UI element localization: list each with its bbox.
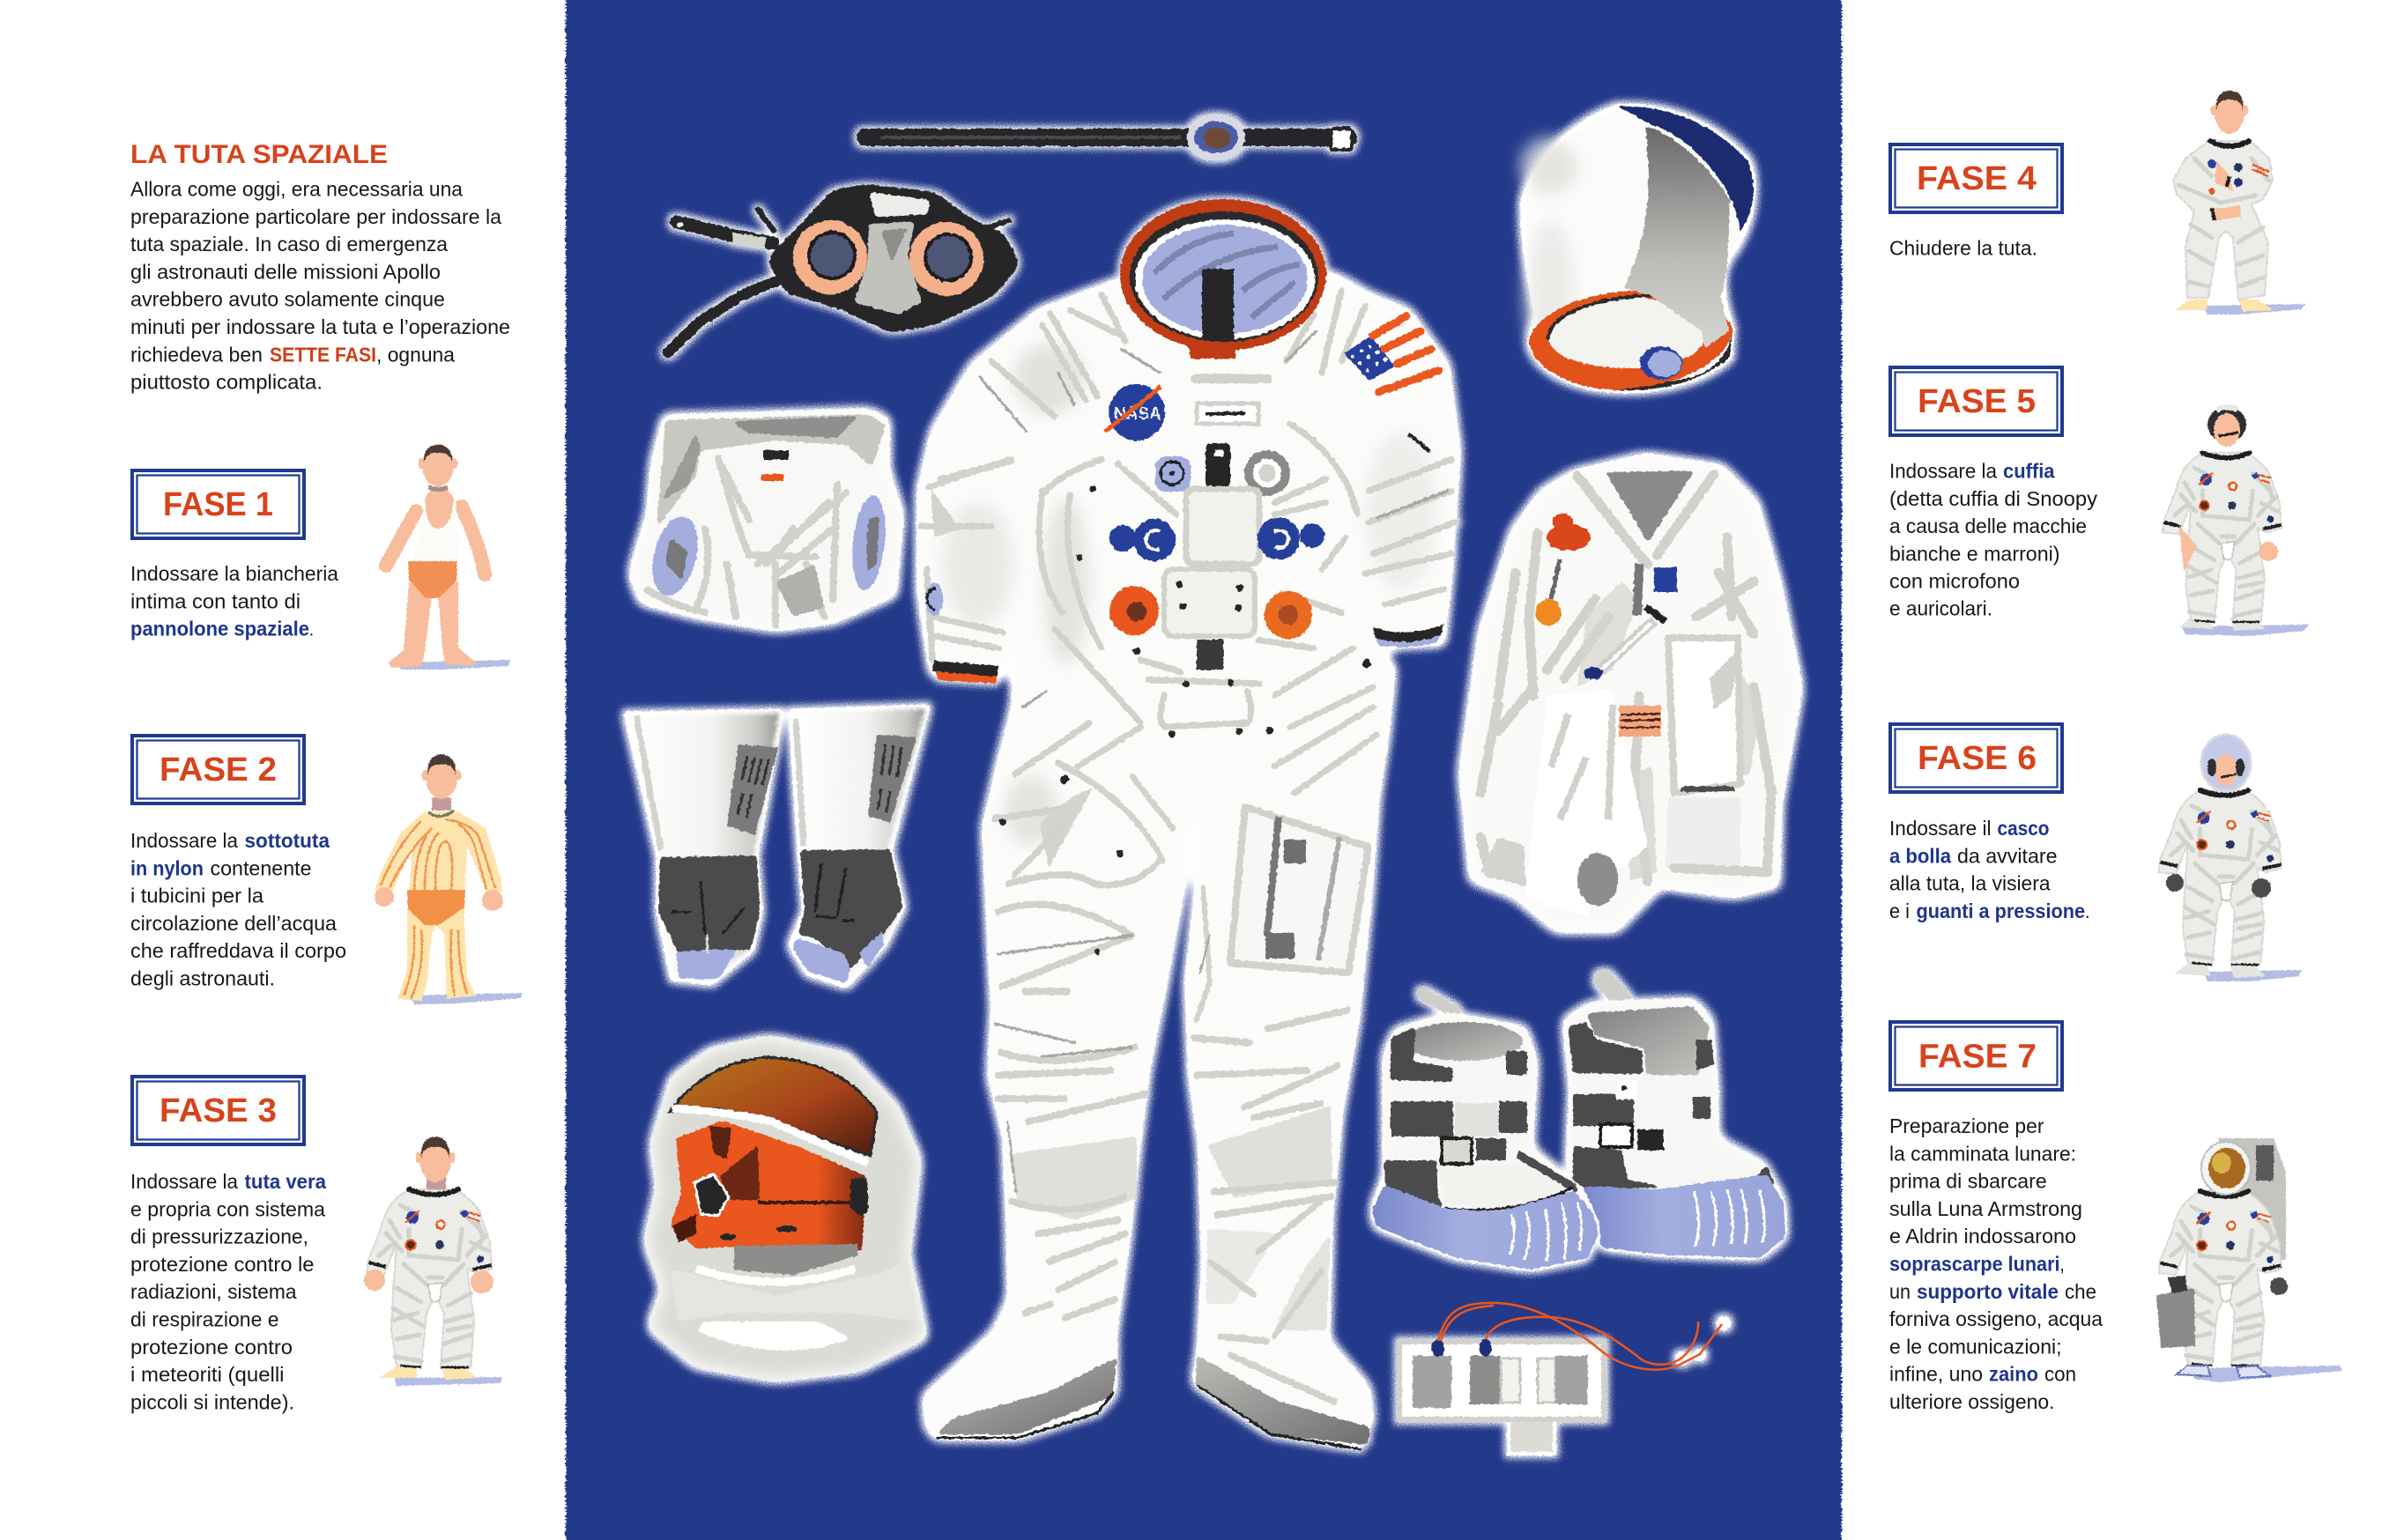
stamp: fase 3 — [132, 1077, 304, 1144]
panel: blue background — [566, 0, 1842, 1540]
text: fase 3: tuta vera — [245, 1170, 327, 1193]
text: fase 7: sulla Luna Armstrong — [1889, 1197, 2082, 1220]
stamp: fase 5: FASE 5 — [1918, 383, 2036, 420]
text: fase 7: forniva ossigeno, acqua — [1889, 1307, 2104, 1330]
text: fase 2: Indossare la — [130, 829, 239, 852]
stamp: fase 6: FASE 6 — [1918, 740, 2037, 777]
figure: cooling undersuit (fase 2) — [375, 754, 523, 1004]
intro paragraph: preparazione particolare per indossare la — [130, 205, 502, 228]
text: fase 1: pannolone spaziale — [130, 618, 309, 640]
text: fase 4: Chiudere la tuta. — [1889, 237, 2037, 260]
stamp: fase 2 — [132, 736, 304, 803]
text: fase 7: prima di sbarcare — [1889, 1170, 2047, 1193]
item: wrist strap — [865, 115, 1352, 160]
right astronaut figures — [2156, 90, 2342, 1382]
text: fase 5: cuffia — [2003, 460, 2055, 483]
text: fase 7: che — [2065, 1280, 2096, 1303]
text: fase 3: di respirazione e — [130, 1307, 278, 1330]
text: fase 2: i tubicini per la — [130, 885, 264, 907]
text: fase 6: alla tuta, la visiera — [1889, 872, 2051, 895]
item: lunar overshoe left — [1372, 994, 1599, 1270]
item: main spacesuit — [918, 199, 1459, 1449]
chest connectors — [1109, 443, 1324, 670]
NASA patch — [1105, 384, 1165, 441]
text: fase 5: e auricolari. — [1889, 597, 1992, 620]
NASA patch: NASA — [1114, 404, 1161, 424]
title: LA TUTA SPAZIALE — [130, 140, 388, 169]
text: fase 6: e i — [1889, 900, 1910, 922]
text: fase 6: guanti a pressione — [1916, 900, 2085, 922]
intro paragraph: tuta spaziale. In caso di emergenza — [130, 233, 449, 255]
illustration: space suit components — [626, 107, 1800, 1454]
left astronaut figures — [364, 444, 523, 1386]
text: fase 3: protezione contro — [130, 1336, 293, 1359]
stamp: fase 5 — [1890, 367, 2062, 435]
item: helmet liner — [1523, 107, 1754, 390]
text: fase 7: supporto vitale — [1917, 1280, 2059, 1303]
item: cooling garment jacket — [1461, 455, 1800, 930]
text: fase 2: sottotuta — [245, 829, 330, 852]
stamp: fase 6 — [1890, 724, 2062, 792]
text: fase 7 — [1889, 1114, 2104, 1413]
text: fase 6: casco — [1997, 817, 2050, 840]
text: fase 6: . — [2085, 900, 2090, 922]
right column text — [1889, 144, 2104, 1413]
stamp: fase 4 — [1890, 144, 2062, 212]
intro paragraph: richiedeva ben — [130, 343, 263, 366]
text: fase 1: intima con tanto di — [130, 589, 300, 612]
text: fase 6: da avvitare — [1957, 844, 2057, 867]
stamp: fase 3: FASE 3 — [160, 1092, 277, 1129]
suit shading patches — [931, 344, 1436, 1330]
text: fase 3: di pressurizzazione, — [130, 1225, 308, 1248]
text: fase 2: circolazione dell’acqua — [130, 912, 338, 935]
suit leg fold lines — [994, 763, 1348, 1402]
stamp: fase 4: FASE 4 — [1917, 160, 2037, 197]
intro paragraph: , ognuna — [376, 343, 456, 366]
item: left glove — [626, 711, 782, 983]
flag patch — [1344, 316, 1439, 392]
text: fase 7: infine, uno — [1889, 1363, 1983, 1386]
stamp: fase 2: FASE 2 — [160, 751, 277, 789]
text: fase 7: Preparazione per — [1889, 1114, 2044, 1137]
intro paragraph: SETTE FASI — [270, 343, 376, 366]
text: fase 7: ulteriore ossigeno. — [1889, 1390, 2055, 1413]
text: fase 2: in nylon — [130, 856, 204, 879]
item: biomedical belt with wires — [1399, 1316, 1731, 1454]
intro paragraph: avrebbero avuto solamente cinque — [130, 288, 445, 311]
text: fase 5: Indossare la — [1889, 460, 1998, 483]
suit boot soles — [937, 1355, 1370, 1449]
text: fase 5: bianche e marroni) — [1889, 542, 2060, 565]
suit chest fold lines — [921, 290, 1456, 793]
text: fase 7: con — [2044, 1363, 2076, 1386]
text: fase 6: a bolla — [1889, 844, 1952, 867]
suit cuffs — [925, 433, 1443, 684]
suit neck ring and visor — [1120, 199, 1326, 359]
text: fase 5: (detta cuffia di Snoopy — [1889, 487, 2097, 510]
text: fase 7: soprascarpe lunari — [1889, 1253, 2060, 1276]
text: fase 7: zaino — [1989, 1363, 2038, 1386]
item: pressure undergarment shorts — [631, 411, 902, 629]
text: fase 7: e le comunicazioni; — [1889, 1335, 2062, 1358]
chest name tag — [1197, 404, 1258, 424]
intro paragraph: minuti per indossare la tuta e l’operazione — [130, 315, 510, 338]
text: fase 2 — [130, 829, 346, 990]
stamp: fase 7 — [1890, 1022, 2062, 1090]
text: fase 1: Indossare la biancheria — [130, 562, 339, 585]
stamp: fase 1 — [132, 470, 304, 538]
text: fase 2: contenente — [210, 856, 312, 879]
stamp: fase 7: FASE 7 — [1918, 1038, 2037, 1075]
text: fase 1: . — [309, 618, 314, 640]
text: fase 2: degli astronauti. — [130, 967, 275, 990]
item: thin orange wires of belt — [1438, 1303, 1722, 1370]
intro paragraph: gli astronauti delle missioni Apollo — [130, 260, 441, 283]
text: fase 6: Indossare il — [1889, 817, 1992, 840]
text: fase 3: Indossare la — [130, 1170, 239, 1193]
intro paragraph: piuttosto complicata. — [130, 371, 323, 394]
figure: snoopy cap (fase 5) — [2163, 404, 2309, 636]
suit snap dots — [999, 486, 1371, 955]
figure: lunar walk gear (fase 7) — [2156, 1138, 2342, 1382]
left column text — [130, 140, 510, 1413]
text: fase 6 — [1889, 817, 2090, 922]
item: communications cap — [646, 1038, 925, 1380]
figure: closed suit (fase 4) — [2173, 90, 2305, 315]
item: goggle mask — [668, 187, 1018, 352]
suit thigh pocket — [1230, 807, 1369, 973]
text: fase 3: e propria con sistema — [130, 1197, 326, 1220]
text: fase 3: i meteoriti (quelli — [130, 1363, 284, 1386]
figure: bubble helmet (fase 6) — [2159, 735, 2302, 981]
item: lunar overshoe right — [1564, 980, 1785, 1258]
text: fase 3: piccoli si intende). — [130, 1390, 294, 1413]
item: right glove — [790, 707, 928, 986]
intro paragraph — [130, 178, 510, 394]
text: fase 5 — [1889, 460, 2097, 620]
text: fase 5: a causa delle macchie — [1889, 515, 2087, 537]
text: fase 2: che raffreddava il corpo — [130, 939, 346, 962]
text: fase 7: , — [2060, 1253, 2065, 1276]
text: fase 5: con microfono — [1889, 569, 2020, 592]
stamp: fase 1: FASE 1 — [163, 486, 273, 523]
text: fase 7: e Aldrin indossarono — [1889, 1225, 2076, 1248]
suit silhouette — [918, 238, 1459, 1448]
text: fase 3 — [130, 1170, 327, 1413]
figure: pressure suit (fase 3) — [364, 1136, 502, 1386]
text: fase 3: protezione contro le — [130, 1253, 314, 1276]
intro paragraph: Allora come oggi, era necessaria una — [130, 178, 464, 201]
text: fase 1 — [130, 562, 339, 640]
figure: underwear (fase 1) — [386, 444, 510, 670]
text: fase 7: un — [1889, 1280, 1911, 1303]
text: fase 7: la camminata lunare: — [1889, 1142, 2076, 1165]
text: fase 3: radiazioni, sistema — [130, 1280, 297, 1303]
